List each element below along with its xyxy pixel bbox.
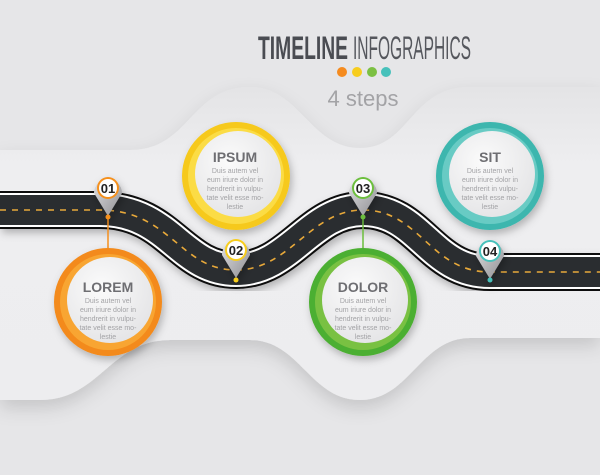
circle: SIT	[436, 122, 544, 230]
circle: DOLOR: lestie	[355, 334, 371, 341]
circle: DOLOR: eum iriure dolor in	[335, 307, 391, 314]
circle: IPSUM: IPSUM	[213, 149, 257, 165]
pin 03	[349, 177, 377, 220]
connector lines	[108, 216, 490, 250]
circle: DOLOR: tate velit esse mo-	[335, 325, 392, 332]
circle: DOLOR: Duis autem vel	[340, 298, 387, 305]
color dots	[337, 67, 391, 77]
pin 01: 01	[101, 181, 115, 196]
title: TIMELINE	[258, 30, 348, 66]
pin 03: 03	[356, 181, 370, 196]
circle: IPSUM: hendrerit in vulpu-	[207, 186, 264, 193]
pin 04	[476, 240, 504, 282]
pin 04: 04	[483, 244, 498, 259]
circle: IPSUM: Duis autem vel	[212, 168, 259, 175]
circle: LOREM: hendrerit in vulpu-	[80, 316, 137, 323]
circle: SIT: tate velit esse mo-	[462, 195, 519, 202]
subtitle: 4 steps	[328, 86, 398, 111]
circle: IPSUM: eum iriure dolor in	[207, 177, 263, 184]
background wave band	[0, 87, 600, 400]
circle: LOREM: tate velit esse mo-	[80, 325, 137, 332]
circle: LOREM	[54, 248, 162, 356]
circle: IPSUM	[182, 122, 290, 230]
pin 01	[94, 177, 122, 220]
circle: DOLOR	[309, 248, 417, 356]
circle: LOREM: LOREM	[83, 279, 133, 295]
road	[0, 210, 600, 272]
circle: IPSUM: lestie	[227, 204, 243, 211]
circle: IPSUM: tate velit esse mo-	[207, 195, 264, 202]
circle: LOREM: lestie	[100, 334, 116, 341]
circle: LOREM: eum iriure dolor in	[80, 307, 136, 314]
pin 02	[222, 239, 250, 282]
pin 02: 02	[229, 243, 243, 258]
circle: LOREM: Duis autem vel	[85, 298, 132, 305]
circle: SIT: lestie	[482, 204, 498, 211]
circle: DOLOR: hendrerit in vulpu-	[335, 316, 392, 323]
circle: DOLOR: DOLOR	[338, 279, 388, 295]
circle: SIT: Duis autem vel	[467, 168, 514, 175]
circle: SIT: eum iriure dolor in	[462, 177, 518, 184]
circle: SIT: hendrerit in vulpu-	[462, 186, 519, 193]
circle: SIT: SIT	[479, 149, 501, 165]
text: INFOGRAPHICS	[353, 30, 471, 66]
